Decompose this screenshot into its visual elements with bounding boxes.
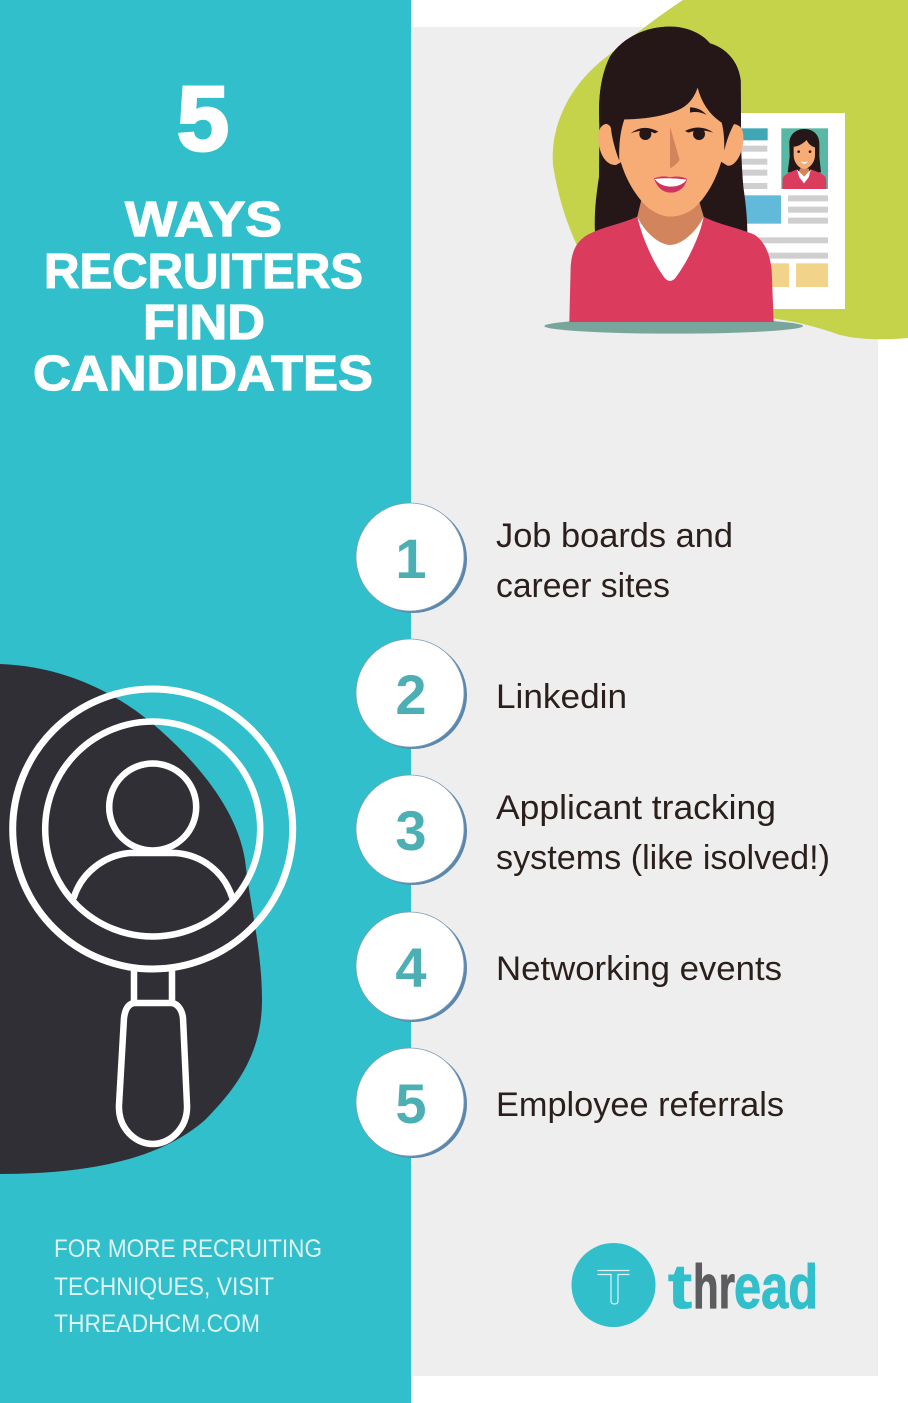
title heading: FIND	[143, 296, 265, 350]
step 3 text: systems (like isolved!)	[496, 839, 830, 877]
step 3 badge	[356, 775, 467, 885]
icon: magnifying glass with person	[13, 689, 293, 1144]
green blob behind recruiter	[553, 0, 908, 339]
panel: gray right column	[411, 27, 878, 1376]
step 1 badge	[356, 503, 467, 613]
footer call to action: TECHNIQUES, VISIT	[54, 1273, 274, 1301]
base shadow	[544, 318, 803, 334]
footer call to action: THREADHCM.COM	[54, 1310, 260, 1338]
step 4 badge: 4	[395, 936, 427, 999]
step 1 text: Job boards and	[496, 517, 733, 555]
ears	[598, 123, 625, 165]
resume portrait	[781, 128, 828, 189]
logo: thread: hr	[693, 1253, 735, 1322]
title heading: RECRUITERS	[44, 245, 363, 299]
white shirt	[637, 217, 704, 281]
neck	[637, 198, 704, 245]
step 4 text: Networking events	[496, 950, 782, 988]
fringe hair	[599, 27, 741, 161]
resume document	[730, 113, 845, 309]
title heading: CANDIDATES	[33, 347, 373, 401]
step 2 badge	[356, 639, 467, 749]
step 5 text: Employee referrals	[496, 1086, 784, 1124]
step 1 text: career sites	[496, 567, 670, 605]
title heading: WAYS	[125, 193, 282, 247]
dark blob behind magnifier	[0, 664, 262, 1174]
title heading	[33, 193, 373, 401]
panel: teal left column	[0, 0, 411, 1403]
back hair	[595, 27, 747, 233]
step 3 text: Applicant tracking	[496, 789, 776, 827]
step 2 badge: 2	[395, 663, 427, 726]
step 5 badge	[356, 1048, 467, 1158]
step 5 badge: 5	[395, 1072, 427, 1135]
sweater	[569, 217, 774, 322]
step 1 badge: 1	[395, 527, 427, 590]
step 1 text	[496, 517, 733, 605]
step 4 badge	[356, 912, 467, 1022]
face	[619, 83, 727, 217]
footer call to action	[54, 1235, 322, 1338]
eyes	[631, 107, 713, 140]
logo: thread: ead	[734, 1253, 818, 1322]
step 2 text: Linkedin	[496, 678, 627, 716]
logo: thread: t	[668, 1253, 692, 1322]
step 3 text	[496, 789, 830, 877]
footer call to action: FOR MORE RECRUITING	[54, 1235, 322, 1263]
step 3 badge: 3	[395, 799, 427, 862]
nose	[670, 127, 680, 168]
illustration: recruiter and resume	[544, 27, 845, 334]
mouth	[654, 176, 687, 193]
title number: 5	[177, 68, 229, 170]
logo: thread	[572, 1243, 818, 1327]
